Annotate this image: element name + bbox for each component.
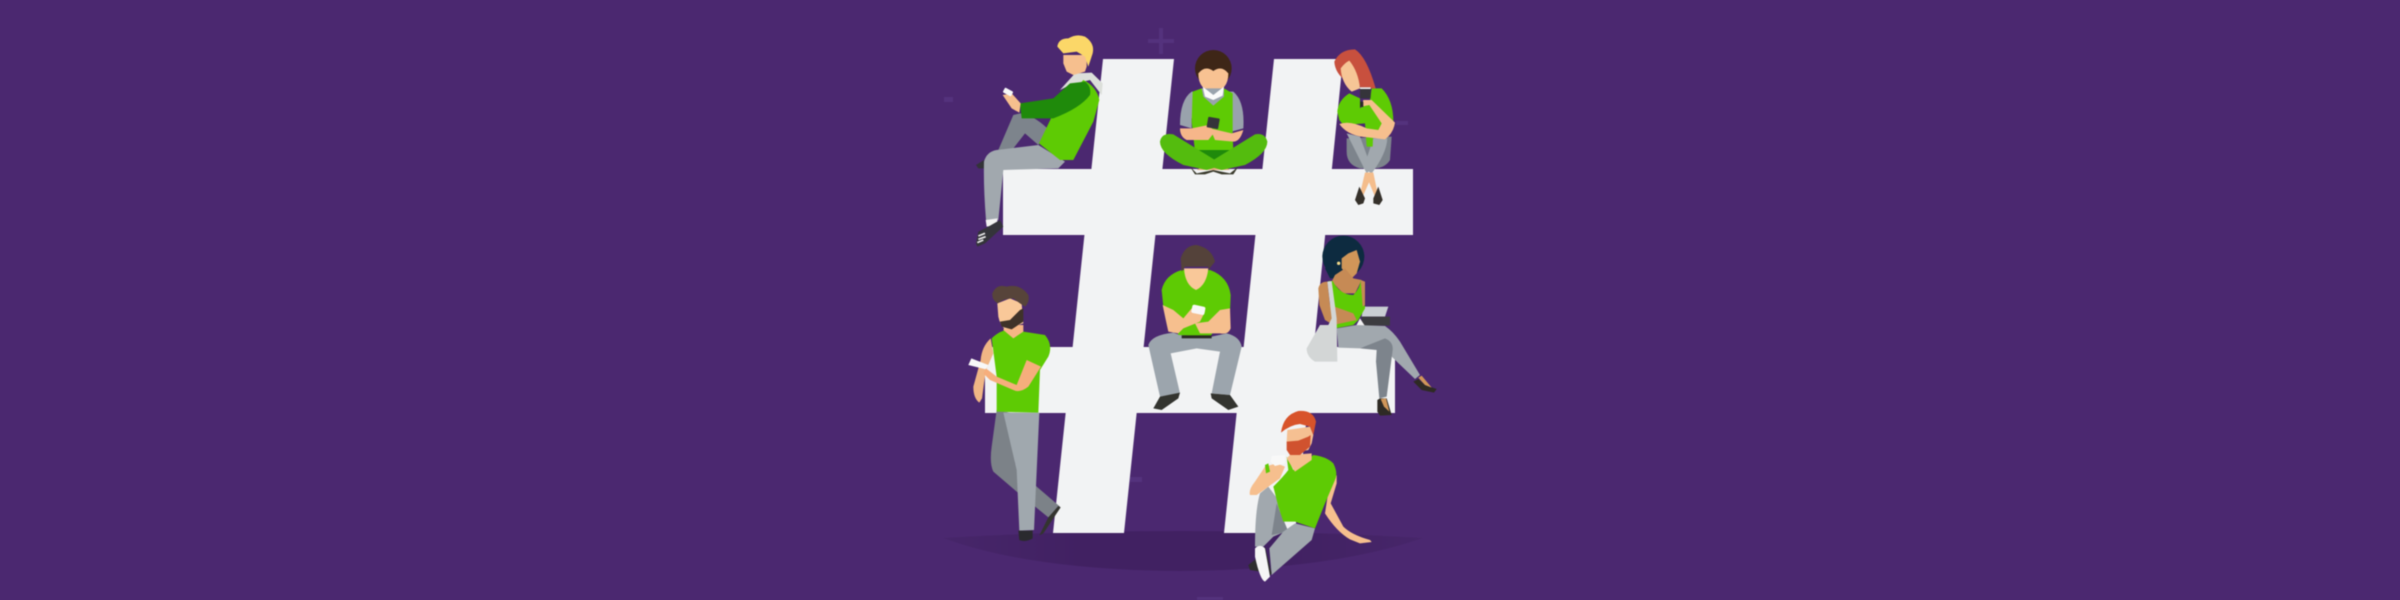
person: man sitting in center with phone	[1148, 245, 1242, 410]
hashtag symbol	[985, 59, 1413, 533]
person: red-bearded man sitting on ground	[1248, 411, 1372, 582]
ground shadow	[943, 531, 1423, 571]
person: blond man sitting on hashtag	[976, 35, 1103, 247]
person: red-haired woman hugging knees	[1334, 49, 1395, 205]
person: woman with bag and laptop	[1307, 236, 1437, 416]
person: bearded man standing with phone	[968, 286, 1061, 541]
decorative plus signs	[944, 28, 1408, 600]
person: cross-legged figure with phone	[1160, 50, 1267, 174]
